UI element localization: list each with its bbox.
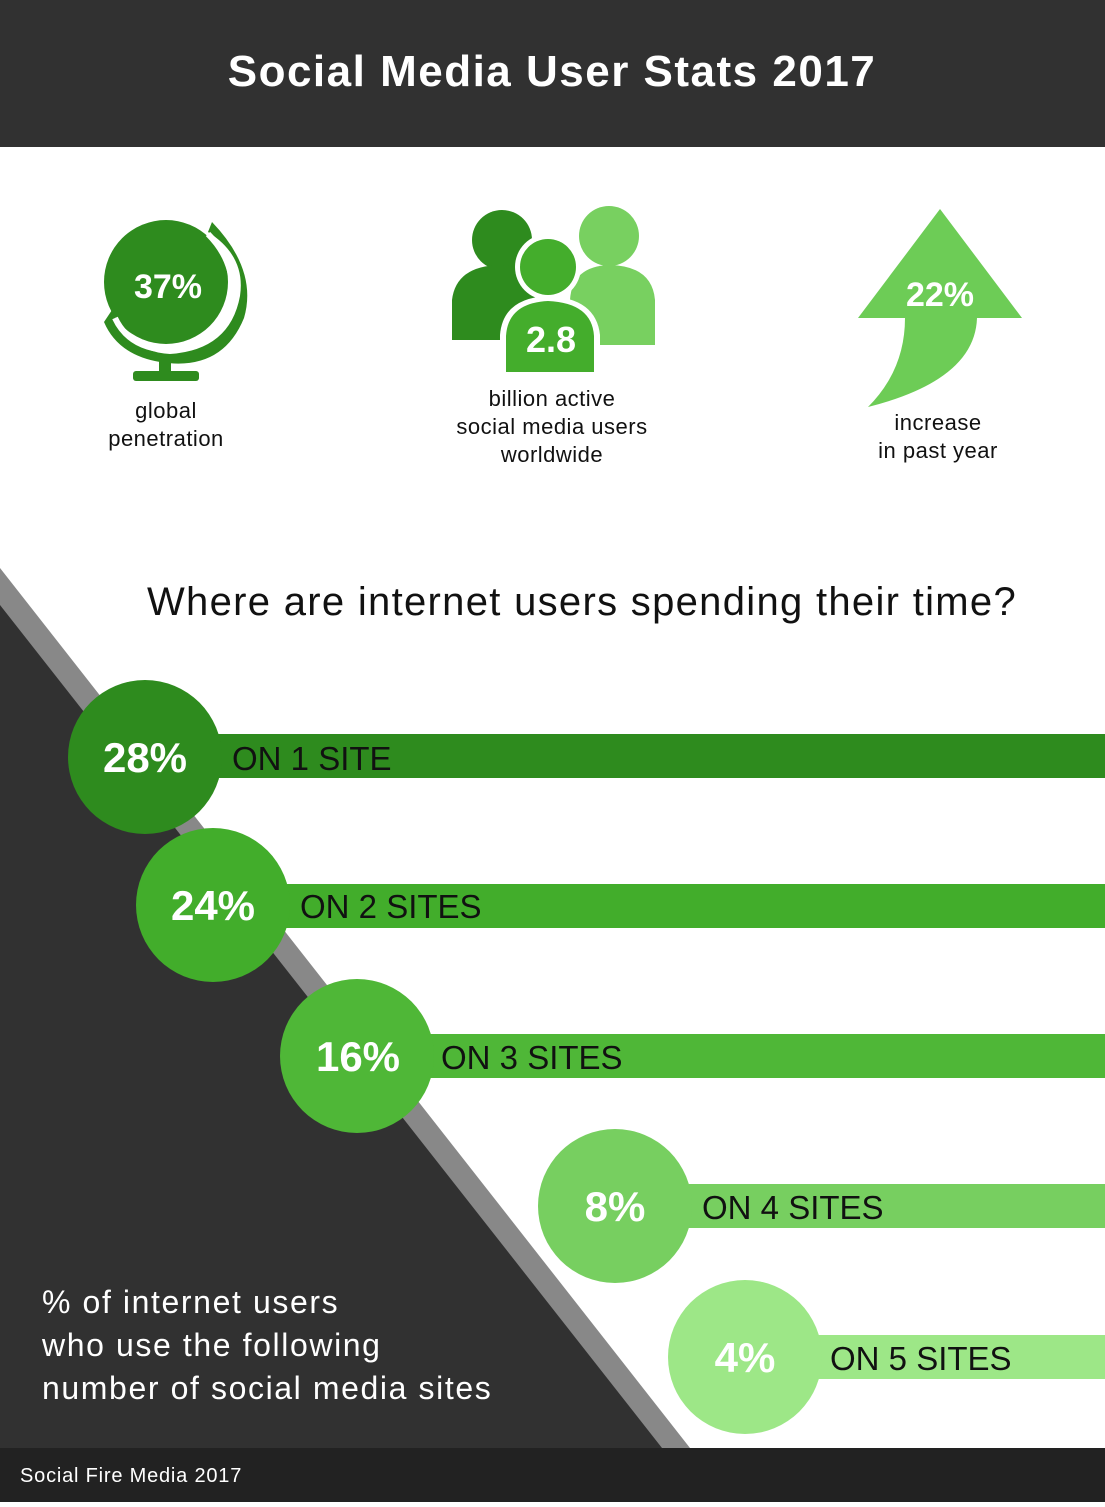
text: billion active users: social media users [456,414,648,439]
footer [0,1448,1105,1502]
text: increase in past year: increase [894,410,982,435]
bar: 28% on 1 site: 28% [103,734,187,781]
text: chart description: number of social media sites [42,1370,492,1406]
bar: 4% on 5 sites: 4% [715,1334,775,1381]
bar: 28% on 1 site: ON 1 SITE [232,740,392,777]
bar: 8% on 4 sites: 8% [585,1183,645,1230]
bar: 4% on 5 sites [668,1280,1105,1434]
text: global penetration: global [135,398,197,423]
text: billion active users: worldwide [500,442,603,467]
icon: people 2.8: 2.8 [526,319,576,360]
bar: 24% on 2 sites: ON 2 SITES [300,888,482,925]
bar: 8% on 4 sites: ON 4 SITES [702,1189,884,1226]
diagonal background panel [0,568,690,1448]
footer: Social Fire Media 2017 [20,1465,242,1487]
bar: 16% on 3 sites [280,979,1105,1133]
text: chart description: % of internet users [42,1284,339,1320]
text: billion active users: billion active [489,386,615,411]
bar: 28% on 1 site [68,680,1105,834]
icon: globe 37% [104,220,247,381]
section heading: Where are internet users spending their time? [147,580,1017,624]
bar: 4% on 5 sites: ON 5 SITES [830,1340,1012,1377]
header bar [0,0,1105,147]
text: global penetration: penetration [108,426,224,451]
icon: globe 37%: 37% [134,268,202,306]
text: chart description: who use the following [41,1327,382,1363]
bar: 24% on 2 sites [136,828,1105,982]
bar: 16% on 3 sites: 16% [316,1033,400,1080]
text: increase in past year: in past year [878,438,998,463]
bar: 8% on 4 sites [538,1129,1105,1283]
icon: arrow 22% [858,209,1022,407]
icon: people 2.8 [452,206,655,375]
bar: 16% on 3 sites: ON 3 SITES [441,1039,623,1076]
bar: 24% on 2 sites: 24% [171,882,255,929]
icon: arrow 22%: 22% [906,276,974,314]
title: Social Media User Stats 2017 [228,47,876,96]
